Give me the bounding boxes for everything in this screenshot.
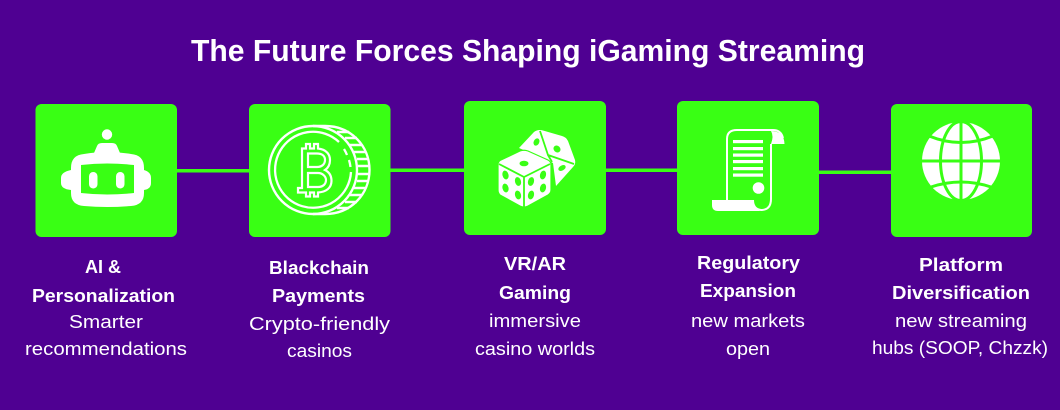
panel: VR/AR gaming: casino worlds bbox=[475, 338, 595, 359]
description: Crypto-friendly bbox=[249, 313, 391, 334]
card background bbox=[464, 101, 606, 235]
panel: platform diversification: hubs (SOOP, Chzzk) bbox=[872, 337, 1048, 358]
panel: platform diversification: Diversification bbox=[892, 283, 1030, 303]
connector: card 4 to card 5 bbox=[818, 170, 892, 174]
panel: blockchain payments: casinos bbox=[287, 340, 352, 361]
description: new streaming bbox=[895, 310, 1027, 331]
title: The Future Forces Shaping iGaming Streaming bbox=[191, 33, 865, 68]
panel: regulatory expansion: open bbox=[726, 338, 770, 359]
icon: robot bbox=[61, 129, 151, 207]
icon: dice bbox=[498, 130, 575, 207]
panel: AI and personalization: Personalization bbox=[32, 286, 175, 306]
panel: AI and personalization: recommendations bbox=[25, 338, 187, 359]
panel: regulatory expansion: Expansion bbox=[700, 281, 796, 301]
description: immersive bbox=[489, 310, 581, 331]
heading: Regulatory bbox=[697, 253, 800, 273]
panel: platform diversification bbox=[872, 104, 1048, 358]
panel: blockchain payments bbox=[249, 104, 391, 361]
card background bbox=[36, 104, 177, 237]
card background bbox=[249, 104, 390, 237]
connector: card 3 to card 4 bbox=[605, 168, 678, 172]
card background bbox=[677, 101, 819, 235]
connector: card 1 to card 2 bbox=[176, 169, 250, 172]
heading: Blackchain bbox=[269, 258, 369, 278]
description: new markets bbox=[691, 310, 805, 331]
description: Smarter bbox=[69, 311, 143, 332]
icon: scroll document bbox=[712, 130, 784, 211]
connector: card 2 to card 3 bbox=[390, 168, 465, 172]
panel: regulatory expansion bbox=[677, 101, 819, 359]
icon: globe bbox=[921, 121, 1001, 201]
card background bbox=[891, 104, 1032, 237]
icon: bitcoin coin bbox=[269, 126, 370, 214]
panel: blockchain payments: Payments bbox=[272, 286, 365, 306]
heading: Platform bbox=[919, 255, 1003, 275]
heading: AI & bbox=[85, 257, 121, 277]
panel: VR/AR gaming bbox=[464, 101, 606, 359]
panel: VR/AR gaming: Gaming bbox=[499, 283, 571, 303]
heading: VR/AR bbox=[504, 254, 566, 274]
panel: AI and personalization bbox=[25, 104, 187, 359]
